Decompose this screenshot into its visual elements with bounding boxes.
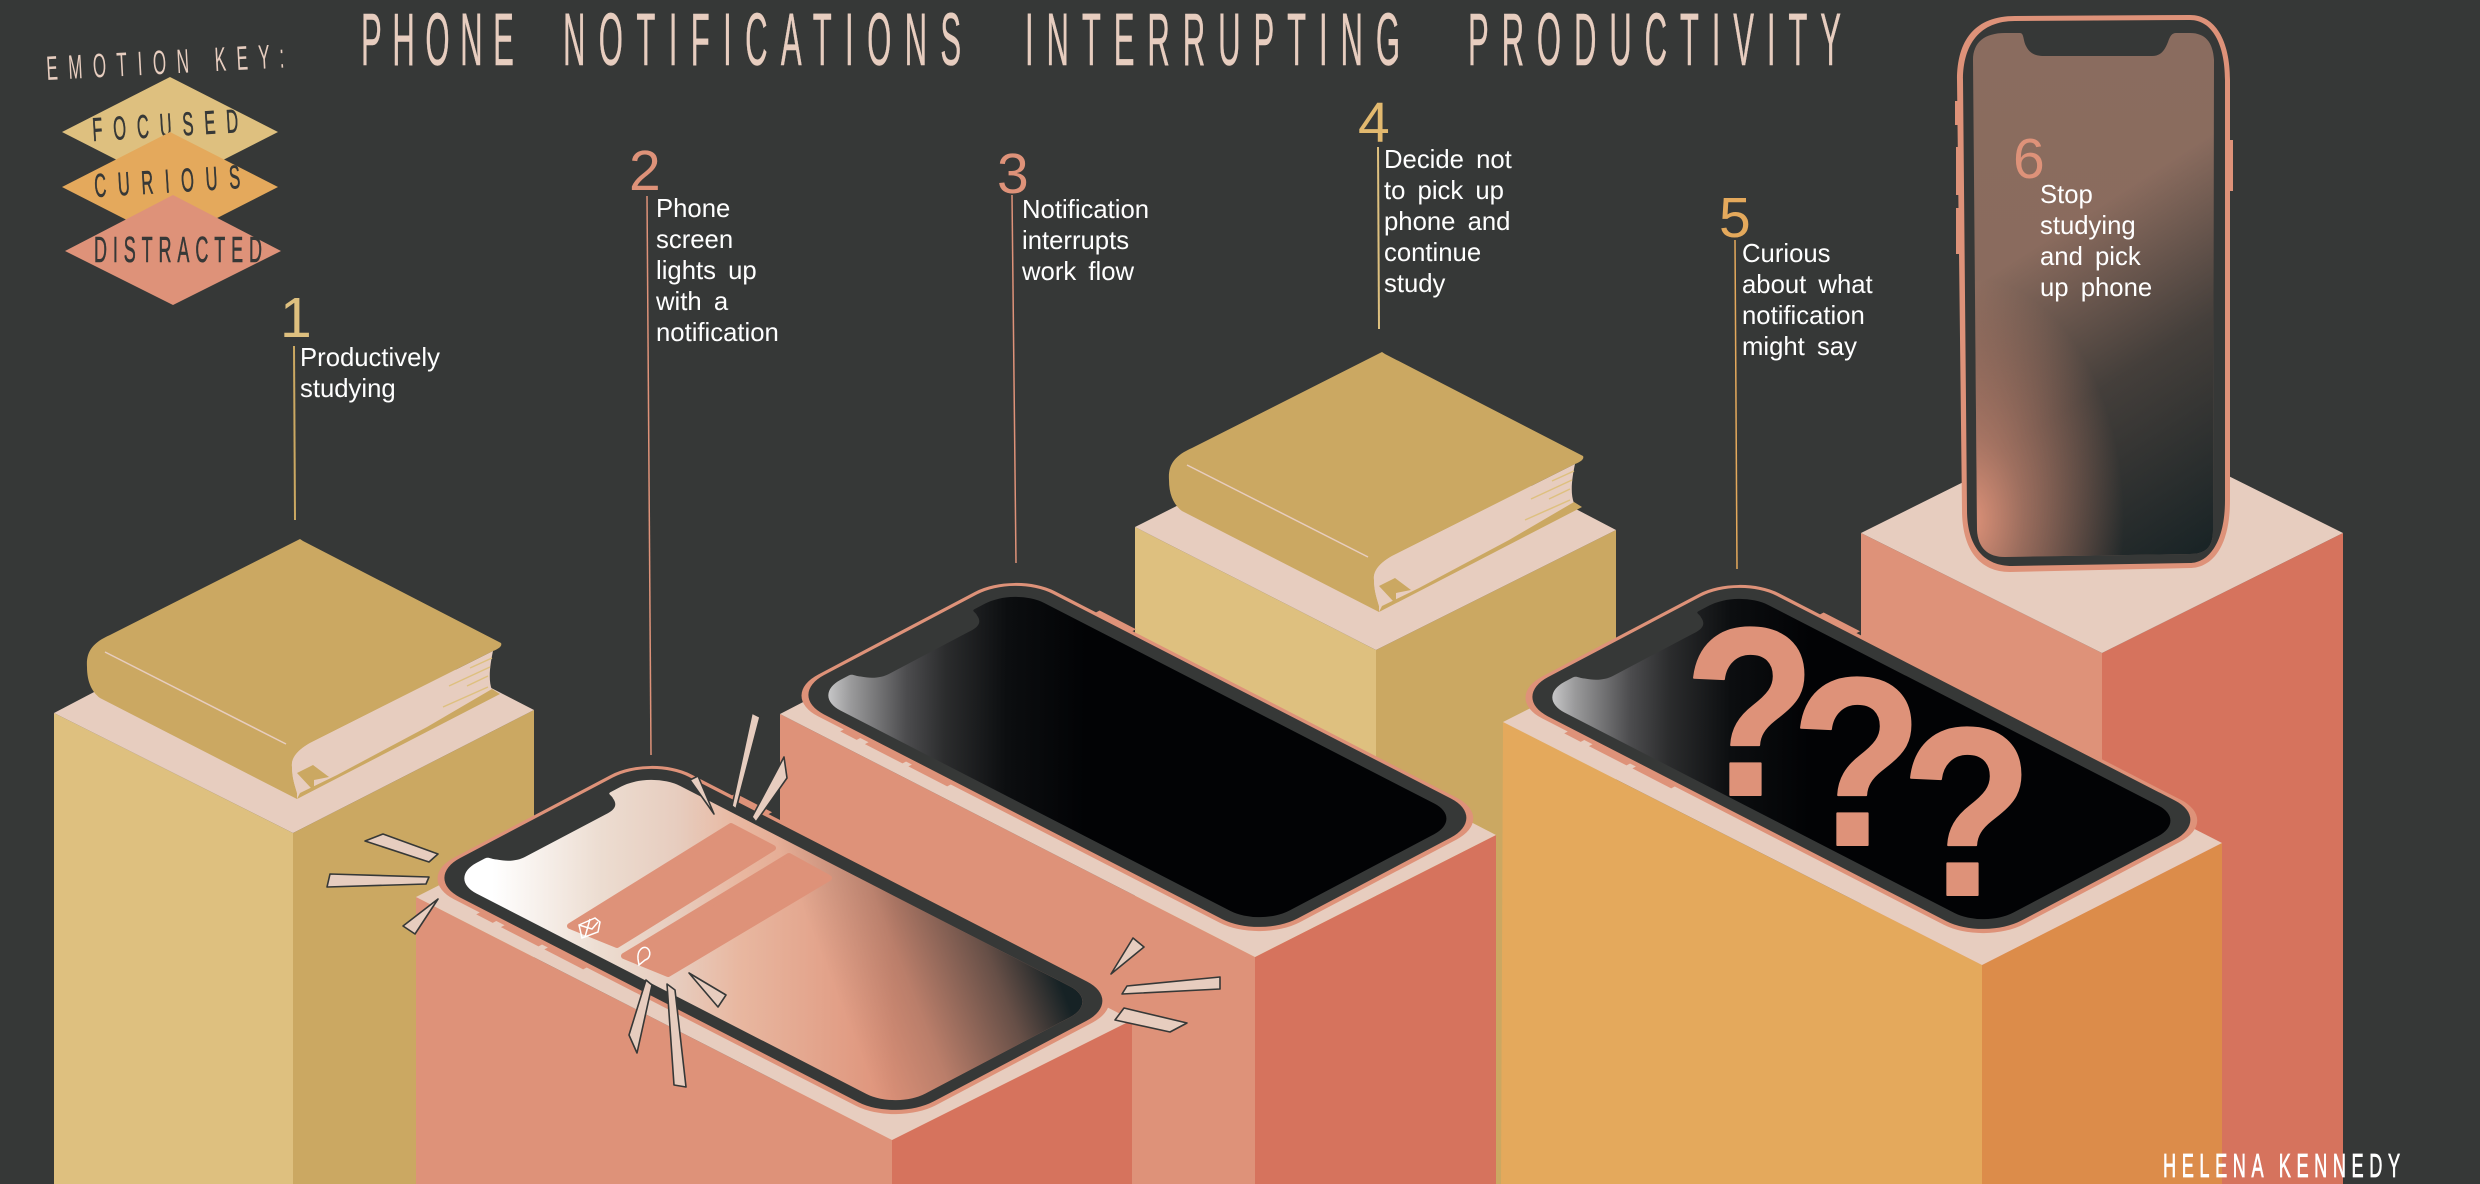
question marks: ? <box>1684 578 1816 847</box>
step 2 label: 2 <box>629 139 661 203</box>
block 5: curious <box>1501 600 2222 1184</box>
step 1 label <box>280 286 440 520</box>
step 6 label <box>2013 127 2152 302</box>
block 4: focused <box>1135 405 1616 1184</box>
notification card 1 <box>570 826 773 945</box>
question marks: ? <box>1901 678 2033 947</box>
step 4 label: Decide not <box>1384 146 1512 174</box>
step 4 label: study <box>1384 270 1446 298</box>
phone 6: upright on block 6 <box>1955 15 2233 572</box>
step 1 label: 1 <box>280 286 312 350</box>
step 2 label: lights up <box>656 257 757 285</box>
block 6: distracted <box>1861 413 2343 1184</box>
step 4 label: 4 <box>1358 91 1390 155</box>
step 5 label: about what <box>1742 271 1873 299</box>
step 2 label: notification <box>656 319 779 347</box>
step 4 label: continue <box>1384 239 1481 267</box>
step 3 label: work flow <box>1021 258 1135 286</box>
icon: book on block 1 <box>87 539 501 799</box>
step 3 label: interrupts <box>1022 227 1129 255</box>
step 3 label: 3 <box>997 142 1029 206</box>
step 4 label: phone and <box>1384 208 1510 236</box>
step 5 label: notification <box>1742 302 1865 330</box>
step 6 label: 6 <box>2013 127 2045 191</box>
title: PRODUCTIVITY <box>1468 0 1841 82</box>
title: NOTIFICATIONS <box>563 0 961 82</box>
block 2: distracted <box>416 775 1132 1184</box>
step 5 label: Curious <box>1742 240 1831 268</box>
notification burst shards <box>327 713 1220 1087</box>
curious label: CURIOUS <box>93 158 241 205</box>
phone 2: lit screen with notifications <box>410 752 1136 1128</box>
step 2 label: screen <box>656 226 733 254</box>
step 1 label: studying <box>300 375 396 403</box>
curious diamond <box>62 132 278 242</box>
step 3 label <box>997 142 1149 563</box>
step 6 label: studying <box>2040 212 2136 240</box>
distracted diamond <box>65 195 281 305</box>
focused label: FOCUSED <box>91 102 239 149</box>
title: INTERRUPTING <box>1025 0 1400 82</box>
title: PHONE <box>361 0 514 82</box>
question marks <box>1684 578 2033 947</box>
notification card 2 <box>624 856 829 974</box>
phone 3: black screen lying flat <box>774 569 1500 945</box>
icon: speech bubble <box>638 947 650 965</box>
title <box>361 0 1841 82</box>
step 5 label <box>1719 186 1873 569</box>
key heading: EMOTION KEY: <box>45 37 285 88</box>
icon: envelope <box>579 918 600 938</box>
step 3 label: Notification <box>1022 196 1149 224</box>
block 1: focused <box>54 587 534 1184</box>
distracted label: DISTRACTED <box>94 230 262 271</box>
step 2 label: Phone <box>656 195 730 223</box>
step 2 label <box>629 139 779 755</box>
step 6 label: up phone <box>2040 274 2152 302</box>
emotion key <box>45 37 285 305</box>
step 6 label: Stop <box>2040 181 2093 209</box>
question marks: ? <box>1791 628 1923 897</box>
icon: book on block 4 <box>1169 352 1583 612</box>
block 3: distracted <box>780 590 1496 1184</box>
step 2 label: with a <box>655 288 729 316</box>
step 4 label <box>1358 91 1512 329</box>
phone 5: black screen with question marks <box>1498 571 2224 947</box>
step 6 label: and pick <box>2040 243 2141 271</box>
step 5 label: 5 <box>1719 186 1751 250</box>
step 1 label: Productively <box>300 344 440 372</box>
focused diamond <box>62 77 278 187</box>
step 4 label: to pick up <box>1384 177 1504 205</box>
signature: HELENA KENNEDY <box>2163 1147 2400 1184</box>
step 5 label: might say <box>1742 333 1857 361</box>
